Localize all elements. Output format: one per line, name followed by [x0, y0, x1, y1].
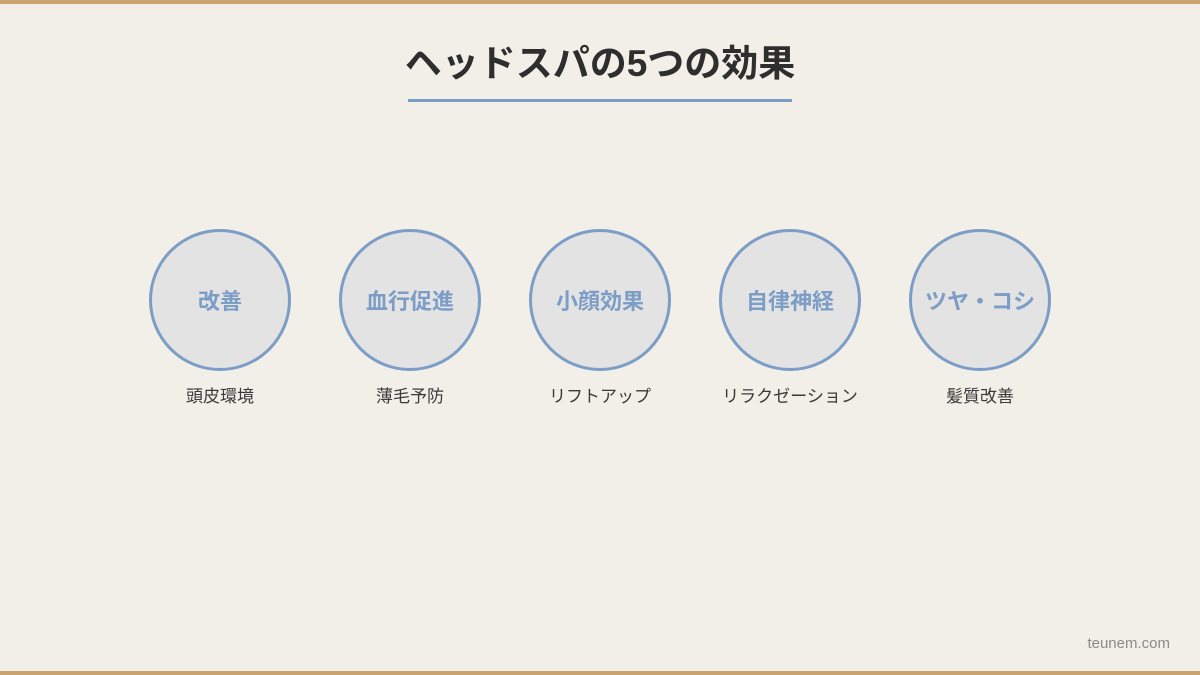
item: 改善: [149, 229, 291, 406]
footer credit: teunem.com: [1087, 635, 1170, 652]
label: 頭皮環境: 頭皮環境: [186, 387, 254, 406]
circle: 改善: [149, 229, 291, 371]
circle: 血行促進: [339, 229, 481, 371]
item: 小顔効果: [529, 229, 671, 406]
item: 血行促進: [339, 229, 481, 406]
label: 薄毛予防: 薄毛予防: [376, 387, 444, 406]
label: 髪質改善: 髪質改善: [946, 387, 1014, 406]
title: ヘッドスパの5つの効果: [405, 43, 795, 84]
circle: 改善: 改善: [198, 289, 242, 314]
circle: 小顔効果: [529, 229, 671, 371]
circle: ツヤ・コシ: ツヤ・コシ: [925, 289, 1035, 314]
label: リラクゼーション: リラクゼーション: [722, 387, 858, 406]
item: 自律神経: [719, 229, 861, 406]
circle: 自律神経: 自律神経: [746, 289, 834, 314]
circle: 血行促進: 血行促進: [366, 289, 454, 314]
item: ツヤ・コシ: [909, 229, 1051, 406]
circle: 小顔効果: 小顔効果: [556, 289, 644, 314]
label: リフトアップ: リフトアップ: [549, 387, 651, 406]
circle: 自律神経: [719, 229, 861, 371]
circle: ツヤ・コシ: [909, 229, 1051, 371]
